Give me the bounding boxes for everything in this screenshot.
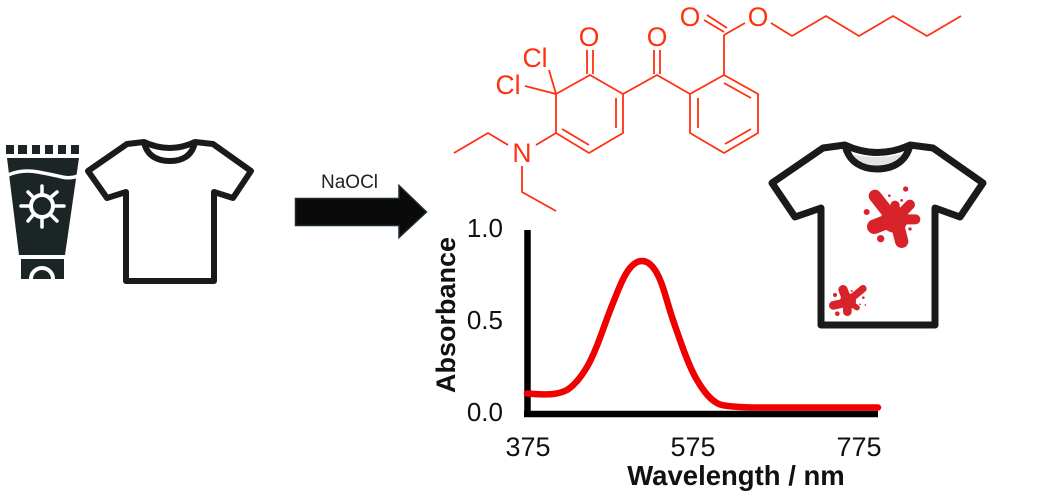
icon: clean t-shirt (88, 142, 251, 281)
chemical structure: dichlorinated product: Cl (495, 70, 521, 100)
x axis tick labels: 375 (505, 432, 551, 462)
y axis tick labels: 0.0 (467, 397, 503, 427)
x axis tick labels: 575 (670, 432, 716, 462)
chemical structure: dichlorinated product: O (748, 2, 768, 32)
y axis tick labels (467, 213, 503, 427)
y axis title: Absorbance (431, 237, 461, 393)
absorbance curve (527, 261, 878, 408)
x axis title: Wavelength / nm (627, 460, 845, 491)
chemical structure: dichlorinated product: O (680, 2, 700, 32)
y axis tick labels: 1.0 (467, 213, 503, 243)
arrow: reaction arrow (296, 186, 426, 238)
reagent label: NaOCl: NaOCl (321, 172, 378, 193)
chart: absorbance spectrum (431, 213, 882, 491)
icon: stained t-shirt (772, 145, 983, 325)
icon: sunscreen tube (6, 145, 79, 279)
x axis tick labels (505, 432, 882, 462)
x axis tick labels: 775 (836, 432, 882, 462)
stain: large splat (864, 186, 915, 242)
chemical structure: dichlorinated product: O (647, 22, 667, 52)
stain: small splat (833, 289, 866, 316)
chemical structure: dichlorinated product: Cl (522, 43, 548, 73)
chemical structure: dichlorinated product: N (512, 138, 532, 168)
y axis tick labels: 0.5 (467, 305, 503, 335)
chemical structure: dichlorinated product (454, 2, 961, 211)
chemical structure: dichlorinated product: O (579, 22, 599, 52)
chart axes (524, 230, 878, 417)
